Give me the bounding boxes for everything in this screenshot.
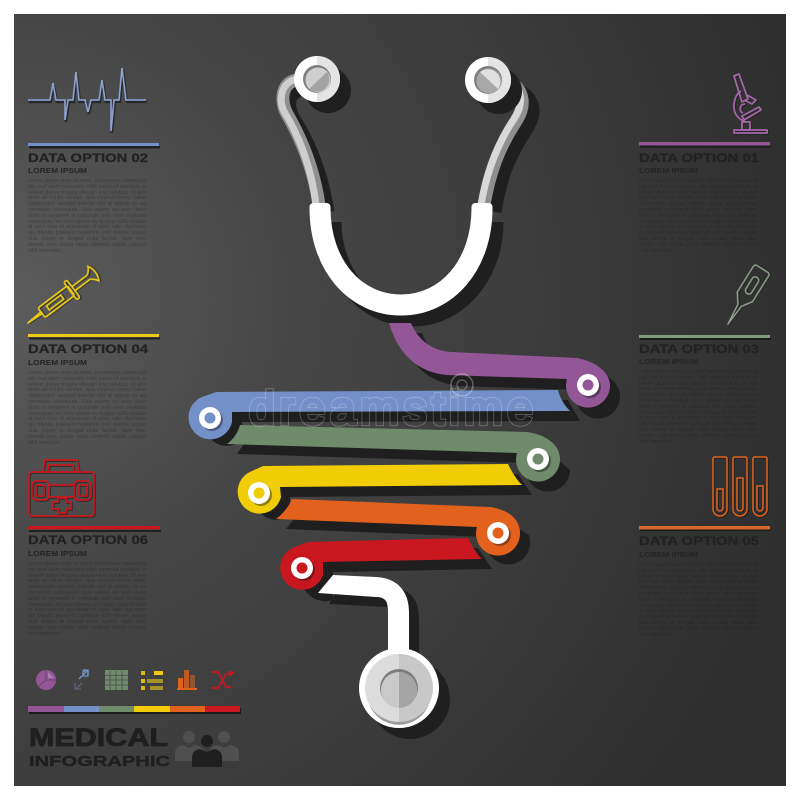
icon: list (141, 671, 163, 690)
heading 02: DATA OPTION 02 (28, 153, 148, 165)
right earpiece (465, 57, 522, 114)
divider line 02 (28, 143, 160, 148)
subheading 06: LOREM IPSUM (28, 549, 87, 558)
icon: microscope (734, 74, 767, 133)
title: medical: MEDICAL (29, 724, 168, 752)
timeline band 1: purple (389, 323, 610, 408)
timeline band 3: green (227, 425, 560, 482)
divider line 05 (639, 526, 771, 531)
icon: heartbeat line (28, 68, 147, 133)
body text 04: Lorem ipsum dolor sit amet, consectetur adipiscing elit, sed diam nonummy nibh euismod tincidunt ut laoreet dolore magna aliquam erat volutpat. Ut wisi enim ad minim veniam, quis nostrud exerci tation ullamcorper suscipit lobortis nisl ut aliquip ex ea commodo consequat. Duis autem vel eum iriure dolor in hendrerit in vulputate velit esse molestie consequat, vel illum dolore eu feugiat nulla facilisis at vero eros et accumsan et iusto odio dignissim qui blandit praesent luptatum zzril delenit augue duis dolore te feugait nulla facilisi. Nam liber tempor cum soluta nobis eleifend option congue nihil imperdiet. (28, 371, 146, 446)
divider line 03 (639, 335, 771, 340)
subheading 05: LOREM IPSUM (639, 550, 698, 559)
small icon row (36, 670, 233, 690)
colour strip (28, 706, 241, 714)
title: infographic: INFOGRAPHIC (29, 753, 170, 770)
timeline band 4: yellow (238, 464, 522, 514)
icon: shuffle arrows (211, 671, 233, 688)
heading 06: DATA OPTION 06 (28, 535, 148, 547)
timeline band 2: blue (189, 390, 570, 439)
icon: pie chart (36, 670, 56, 690)
heading 05: DATA OPTION 05 (639, 536, 760, 548)
icon: syringe (21, 263, 102, 332)
icon: expand arrows (75, 670, 88, 689)
divider line 06 (28, 526, 161, 532)
subheading 02: LOREM IPSUM (28, 166, 87, 175)
left ear tube (281, 79, 328, 212)
panel: data option 01 (639, 74, 771, 255)
body text 03: Lorem ipsum dolor sit amet, consectetur adipiscing elit, sed diam nonummy nibh euismod tincidunt ut laoreet dolore magna aliquam erat volutpat. Ut wisi enim ad minim veniam, quis nostrud exerci tation ullamcorper suscipit lobortis nisl ut aliquip ex ea commodo consequat. Duis autem vel eum iriure dolor in hendrerit in vulputate velit esse molestie consequat, vel illum dolore eu feugiat nulla facilisis at vero eros et accumsan et iusto odio dignissim qui blandit praesent luptatum zzril delenit augue duis dolore te feugait nulla facilisi. Nam liber tempor cum soluta nobis eleifend option congue nihil imperdiet. (639, 370, 757, 445)
subheading 03: LOREM IPSUM (639, 357, 698, 366)
timeline band 6: red (280, 538, 482, 590)
body text 06: Lorem ipsum dolor sit amet, consectetur adipiscing elit, sed diam nonummy nibh euismod tincidunt ut laoreet dolore magna aliquam erat volutpat. Ut wisi enim ad minim veniam, quis nostrud exerci tation ullamcorper suscipit lobortis nisl ut aliquip ex ea commodo consequat. Duis autem vel eum iriure dolor in hendrerit in vulputate velit esse molestie consequat, vel illum dolore eu feugiat nulla facilisis at vero eros et accumsan et iusto odio dignissim qui blandit praesent luptatum zzril delenit augue duis dolore te feugait nulla facilisi. Nam liber tempor cum soluta nobis eleifend option congue nihil imperdiet. (28, 562, 146, 637)
panel: data option 05 (639, 457, 771, 639)
icon: bar chart (177, 670, 197, 690)
timeline band shadows (205, 333, 620, 660)
heading 01: DATA OPTION 01 (639, 153, 760, 165)
divider line 01 (639, 142, 771, 148)
panel: data option 04 (21, 263, 160, 447)
body text 02: Lorem ipsum dolor sit amet, consectetur adipiscing elit, sed diam nonummy nibh euismod tincidunt ut laoreet dolore magna aliquam erat volutpat. Ut wisi enim ad minim veniam, quis nostrud exerci tation ullamcorper suscipit lobortis nisl ut aliquip ex ea commodo consequat. Duis autem vel eum iriure dolor in hendrerit in vulputate velit esse molestie consequat, vel illum dolore eu feugiat nulla facilisis at vero eros et accumsan et iusto odio dignissim qui blandit praesent luptatum zzril delenit augue duis dolore te feugait nulla facilisi. Nam liber tempor cum soluta nobis eleifend option congue nihil imperdiet. (28, 179, 146, 254)
body text 05: Lorem ipsum dolor sit amet, consectetur adipiscing elit, sed diam nonummy nibh euismod tincidunt ut laoreet dolore magna aliquam erat volutpat. Ut wisi enim ad minim veniam, quis nostrud exerci tation ullamcorper suscipit lobortis nisl ut aliquip ex ea commodo consequat. Duis autem vel eum iriure dolor in hendrerit in vulputate velit esse molestie consequat, vel illum dolore eu feugiat nulla facilisis at vero eros et accumsan et iusto odio dignissim qui blandit praesent luptatum zzril delenit augue duis dolore te feugait nulla facilisi. Nam liber tempor cum soluta nobis eleifend option congue nihil imperdiet. (639, 563, 757, 638)
right ear tube (481, 79, 533, 212)
icon: table grid (105, 670, 128, 690)
panel: data option 02 (28, 68, 160, 255)
subheading 04: LOREM IPSUM (28, 358, 87, 367)
panel: data option 03 (639, 264, 771, 446)
white U-shaped binaural (310, 203, 493, 316)
chest piece (359, 648, 450, 739)
watermark: dreamstime (249, 382, 533, 434)
heading 03: DATA OPTION 03 (639, 344, 759, 356)
stethoscope ear tubes and headset (281, 79, 533, 316)
lower white tube (318, 575, 409, 655)
panel: data option 06 (28, 460, 161, 638)
timeline band 5: orange (276, 499, 520, 556)
heading 04: DATA OPTION 04 (28, 344, 149, 356)
icon: group of people (175, 731, 239, 767)
left earpiece (294, 56, 351, 113)
icon: first aid kit (29, 460, 94, 516)
subheading 01: LOREM IPSUM (639, 166, 698, 175)
divider line 04 (28, 334, 160, 340)
icon: thermometer (720, 264, 770, 329)
icon: test tubes (713, 457, 767, 516)
body text 01: Lorem ipsum dolor sit amet, consectetur adipiscing elit, sed diam nonummy nibh euismod tincidunt ut laoreet dolore magna aliquam erat volutpat. Ut wisi enim ad minim veniam, quis nostrud exerci tation ullamcorper suscipit lobortis nisl ut aliquip ex ea commodo consequat. Duis autem vel eum iriure dolor in hendrerit in vulputate velit esse molestie consequat, vel illum dolore eu feugiat nulla facilisis at vero eros et accumsan et iusto odio dignissim qui blandit praesent luptatum zzril delenit augue duis dolore te feugait nulla facilisi. Nam liber tempor cum soluta nobis eleifend option congue nihil imperdiet. (639, 179, 757, 254)
